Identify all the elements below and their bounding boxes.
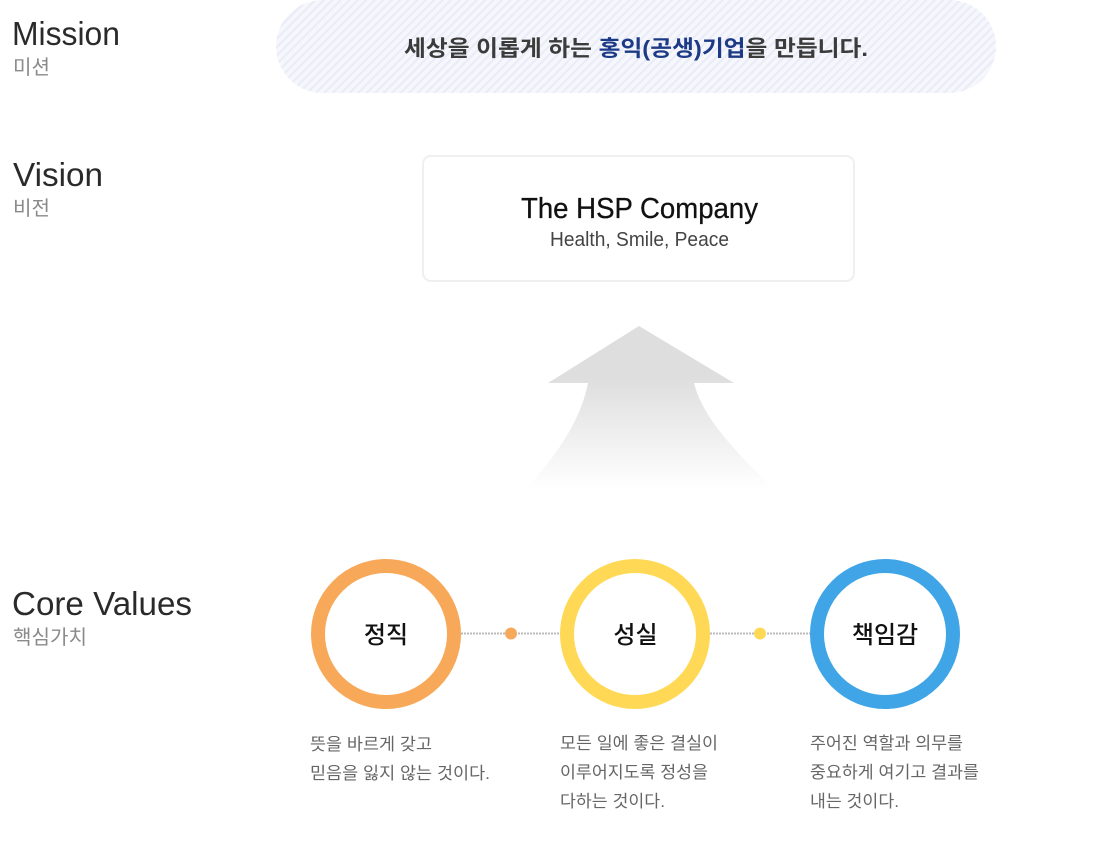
heading: Core Values — [12, 585, 192, 649]
text block: 책임감 description: 주어진 역할과 의무를 — [810, 734, 963, 753]
heading: Core Values: 핵심가치 — [13, 626, 87, 649]
value circle: 책임감: 책임감 — [852, 622, 918, 649]
heading: Vision — [13, 156, 103, 220]
text block: 책임감 description: 내는 것이다. — [810, 792, 899, 811]
value circle: 정직 — [318, 566, 454, 702]
value circle: 책임감 — [817, 566, 953, 702]
text block: 정직 description: 뜻을 바르게 갖고 — [310, 735, 432, 754]
text block: 성실 description: 이루어지도록 정성을 — [560, 763, 708, 782]
text block: 성실 description: 모든 일에 좋은 결실이 — [560, 734, 718, 753]
panel: vision box: The HSP Company — [521, 193, 758, 225]
heading: Mission: Mission — [12, 15, 120, 52]
panel: mission statement pill — [276, 0, 996, 93]
connector: dotted line with orange dot — [461, 628, 560, 640]
text block: 책임감 description: 중요하게 여기고 결과를 — [810, 763, 979, 782]
value circle: 정직: 정직 — [364, 622, 408, 649]
heading: Mission — [12, 15, 120, 79]
text block: 성실 description — [560, 734, 718, 811]
text block: 책임감 description — [810, 734, 979, 811]
value circle: 성실: 성실 — [613, 622, 658, 649]
heading: Mission: 미션 — [13, 56, 50, 79]
arrow: upward gradient arrow — [525, 326, 775, 490]
heading: Vision: 비전 — [13, 197, 50, 220]
value circle: 성실 — [567, 566, 703, 702]
connector: dotted line with yellow dot — [710, 628, 810, 640]
panel: mission statement pill: 세상을 이롭게 하는 홍익(공생)기업 을 만듭니다. — [404, 36, 868, 61]
text block: 성실 description: 다하는 것이다. — [560, 792, 665, 811]
heading: Core Values: Core Values — [12, 585, 192, 622]
text block: 정직 description — [310, 735, 490, 783]
text block: 정직 description: 믿음을 잃지 않는 것이다. — [310, 764, 490, 783]
heading: Vision: Vision — [13, 156, 103, 193]
panel: vision box: Health, Smile, Peace — [550, 229, 729, 251]
panel: vision box — [423, 156, 854, 281]
